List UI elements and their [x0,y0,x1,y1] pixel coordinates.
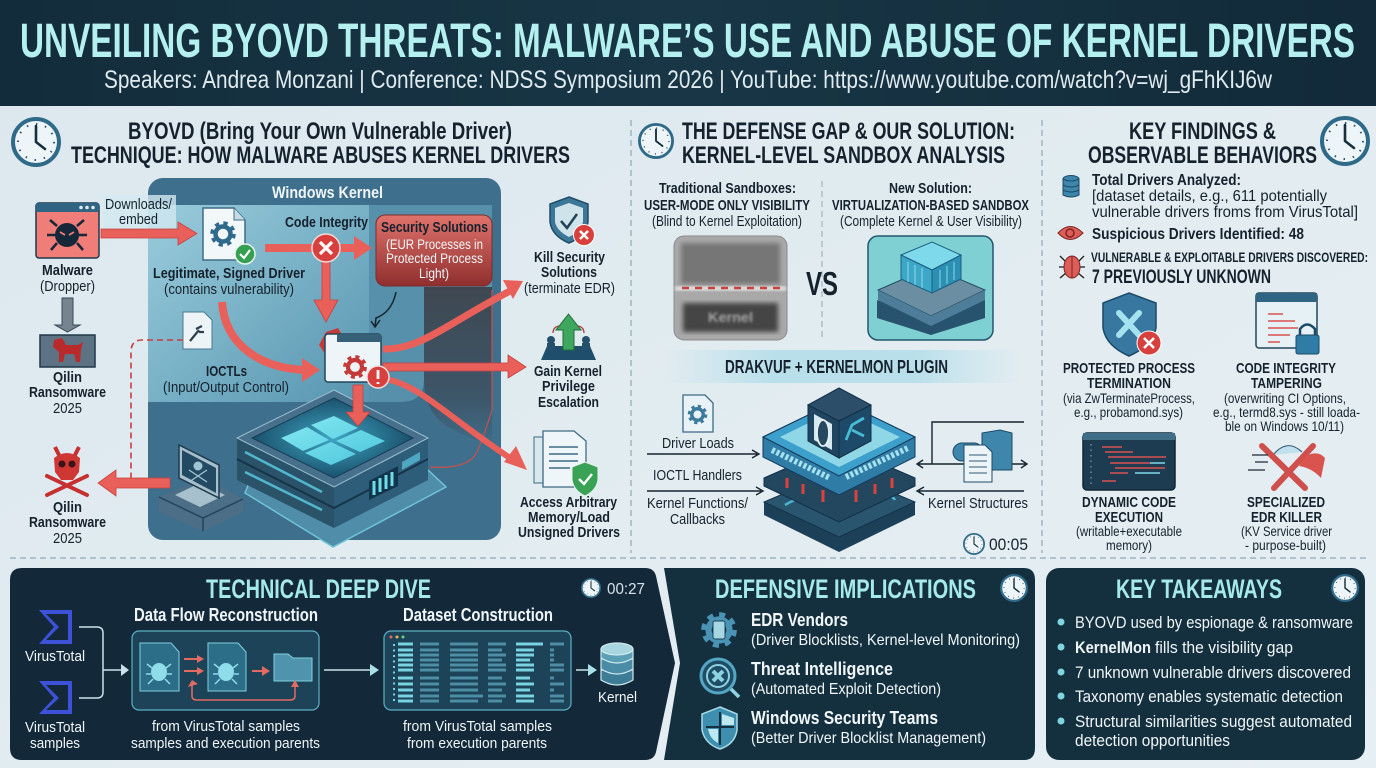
list: takeaways: Structural similarities suggest automated [1075,712,1352,731]
label: VirusTotal samples: VirusTotal [25,719,85,736]
text: dynamic code execution: memory) [1106,537,1152,553]
heading: key takeaways: KEY TAKEAWAYS [1116,574,1282,604]
banner: DRAKVUF KernelMon plugin [665,350,1020,383]
label: gain kernel privilege [534,363,602,411]
icon: bug [1059,256,1085,278]
text: suspicious drivers: Suspicious Drivers Identified: 48 [1092,226,1304,243]
label: gain kernel privilege: Escalation [538,394,599,411]
text: specialized EDR killer: EDR KILLER [1251,509,1322,526]
panel: key takeaways [1046,568,1365,760]
illustration: kernel server [237,390,446,547]
heading: dataset construction: Dataset Construction [403,605,553,625]
text: protected process termination [1063,360,1195,420]
text: traditional sandboxes: (Blind to Kernel Exploitation) [652,213,802,230]
label: kernel functions [647,495,749,528]
label: signed driver: (contains vulnerability) [164,281,294,298]
callout: downloads embed: Downloads/ [105,196,173,213]
text: Windows security teams: (Better Driver Blocklist Management) [751,730,986,747]
diagram: data flow [132,631,319,710]
callout: downloads embed: embed [119,211,158,228]
text: protected process termination: TERMINATION [1087,375,1171,392]
label: Qilin ransomware top: 2025 [53,400,82,417]
icon: dynamic code window [1083,433,1175,490]
text: traditional sandboxes: USER-MODE ONLY VISIBILITY [644,197,810,214]
text: code integrity tampering [1213,360,1360,434]
list: takeaways: KernelMon [1075,638,1151,657]
text: dynamic code execution: DYNAMIC CODE [1082,494,1176,511]
panel: technical deep dive [10,568,675,760]
list: takeaways [1058,613,1353,750]
text: dataset caption: from VirusTotal samples [403,718,552,735]
icon: kernel database [601,643,633,685]
label: kernel: Kernel [598,689,637,706]
icon: compromised process window [319,328,389,388]
label: Qilin ransomware bottom: Qilin [53,499,82,516]
list: takeaways: fills the visibility gap [1155,638,1293,657]
text: specialized EDR killer: SPECIALIZED [1247,494,1325,511]
icon: clock [1332,575,1358,601]
arrow: IOCTL handlers [647,487,763,495]
icon: signed driver document [203,208,255,264]
icon: crossed EDR killer [1248,446,1325,488]
icon: documents with shield [534,431,598,496]
text: code integrity tampering: ble on Windows 10/11) [1225,418,1344,434]
label: kill security solutions [524,249,615,297]
icon: IOCTL document [183,312,212,349]
panel: key findings [1058,118,1368,553]
label: signed driver [153,265,305,298]
panel: BYOVD technique [13,118,620,547]
text: data flow caption: from VirusTotal samples [152,718,300,735]
panel: defensive implications [664,568,1035,760]
text: total drivers: Total Drivers Analyzed: [1092,172,1241,189]
label: arbitrary memory [518,494,620,541]
text: Windows security teams: Windows Security Teams [751,708,938,728]
icon: database [1063,176,1079,197]
arrow: malware to driver [101,222,197,245]
label: code integrity: Code Integrity [285,214,369,231]
header banner [0,0,1376,106]
text: EDR vendors [751,610,1020,649]
arrow: driver loads [647,450,759,458]
icon: ransomware skull [47,447,87,495]
icon: Qilin lion [40,335,95,367]
text: data flow caption: samples and execution parents [131,735,320,752]
arrow: security solutions to exploit [371,292,396,327]
label: IOCTLs [163,363,289,396]
text: dynamic code execution [1076,494,1182,553]
panel: Windows Kernel [148,178,501,540]
text: specialized EDR killer [1241,494,1332,553]
label: Qilin ransomware top [29,369,106,417]
text: vulnerable drivers [1091,249,1368,288]
diagram: kernel structures connectors [917,422,1027,495]
text: threat intelligence: Threat Intelligence [751,659,893,679]
label: kernel structures: Kernel Structures [928,495,1028,512]
label: arbitrary memory: Memory/Load [528,509,610,526]
callout: security solutions: (EUR Processes in [386,236,483,252]
label: Qilin ransomware top: Ransomware [29,384,106,401]
label: Windows Kernel: Windows Kernel [272,183,383,202]
text: EDR vendors: (Driver Blocklists, Kernel-level Monitoring) [751,632,1020,649]
text: new solution [832,180,1029,230]
text: vulnerable drivers: 7 PREVIOUSLY UNKNOWN [1092,267,1271,288]
callout: security solutions: Light) [419,265,449,281]
text: traditional sandboxes [644,180,810,230]
icon: threat search [701,659,739,697]
label: malware dropper: (Dropper) [40,278,95,295]
label: arbitrary memory: Unsigned Drivers [518,524,620,541]
label: kill security solutions: Kill Security [534,249,606,266]
arrow: data flow to dataset [324,664,379,676]
label: signed driver: Legitimate, Signed Driver [153,265,305,282]
timer: 00:05: 00:05 [989,535,1028,554]
icon: windows shield [702,707,737,749]
label: arbitrary memory: Access Arbitrary [520,494,618,511]
label: Qilin ransomware bottom: 2025 [53,530,82,547]
icon: code window lock [1256,293,1319,354]
label: malware dropper: Malware [42,262,93,279]
arrow: exploit to kernel core [346,385,370,426]
text: new solution: New Solution: [889,180,972,197]
label: Qilin ransomware bottom [29,499,106,547]
icon: eye [1058,226,1083,240]
illustration: KernelMon stack [763,388,915,552]
text: total drivers: [dataset details, e.g., 611 potentially [1092,188,1327,205]
label: gain kernel privilege: Gain Kernel [534,363,602,380]
text: protected process termination: e.g., probamond.sys) [1074,404,1183,420]
illustration: blurred traditional sandbox [674,236,787,340]
text: code integrity tampering: CODE INTEGRITY [1236,360,1336,377]
text: dynamic code execution: EXECUTION [1095,509,1163,526]
text: dataset caption [403,718,552,752]
arrow: to privilege escalation [383,355,526,378]
heading: data flow reconstruction: Data Flow Reconstruction [134,605,318,625]
heading: defense gap: KERNEL-LEVEL SANDBOX ANALYSIS [682,142,1005,169]
banner: DRAKVUF KernelMon plugin: DRAKVUF + KERNELMON PLUGIN [725,357,948,377]
arrow: to kill security [383,280,523,349]
icon: clock [639,124,673,158]
text: protected process termination: (via ZwTerminateProcess, [1063,390,1195,406]
label: gain kernel privilege: Privilege [542,378,595,395]
text: total drivers: vulnerable drivers froms from VirusTotal] [1092,204,1358,221]
icon: VirusTotal sigma top [39,610,72,644]
illustration: blurred traditional sandbox: Kernel [708,309,753,325]
arrow: computer to ransomware skull [98,470,170,496]
diagram: dataset table [384,631,571,710]
icon: EDR gear [704,615,734,645]
heading: key findings [1088,118,1317,169]
timer: 00:05 [964,534,1028,554]
text: new solution: (Complete Kernel & User Visibility) [840,213,1022,230]
callout: security solutions: Protected Process [386,250,483,266]
heading: key findings: KEY FINDINGS & [1129,118,1276,145]
text: EDR vendors: EDR Vendors [751,610,848,630]
callout: security solutions [376,215,492,286]
label: VirusTotal samples [25,719,85,752]
heading: BYOVD technique [71,118,570,169]
label: kill security solutions: Solutions [541,264,597,281]
arrow: dashed IOCTL path [131,340,183,478]
label: driver loads: Driver Loads [662,435,734,452]
text: data flow caption [131,718,320,752]
heading: BYOVD technique: TECHNIQUE: HOW MALWARE ABUSES KERNEL DRIVERS [71,142,570,169]
heading: defense gap [682,118,1015,169]
label: VirusTotal: VirusTotal [25,648,85,665]
label: IOCTLs: (Input/Output Control) [163,379,289,396]
label: IOCTL handlers: IOCTL Handlers [653,467,742,484]
icon: clock [13,119,59,165]
text: specialized EDR killer: - purpose-built) [1245,537,1326,553]
heading: defensive implications: DEFENSIVE IMPLICATIONS [715,574,976,604]
icon: clock [1001,575,1027,601]
icon: protected process shield [1103,293,1161,356]
callout: downloads embed [103,195,176,232]
list: takeaways: detection opportunities [1075,731,1230,750]
list: takeaways: Taxonomy enables systematic detection [1075,687,1343,706]
text: new solution: VIRTUALIZATION-BASED SANDBOX [832,197,1029,214]
label: kernel functions: Callbacks [670,511,725,528]
illustration: virtualization sandbox [868,236,993,340]
text: traditional sandboxes: Traditional Sandboxes: [659,180,796,197]
label: malware dropper [40,262,95,295]
timer: 00:27: 00:27 [607,581,645,598]
icon: VirusTotal sigma bottom [39,681,72,714]
text: code integrity tampering: TAMPERING [1251,375,1322,392]
label: VirusTotal samples: samples [30,735,80,752]
text: protected process termination: PROTECTED PROCESS [1063,360,1195,377]
icon: driver file [683,395,713,432]
arrow: to arbitrary memory [385,379,527,470]
text: threat intelligence [751,659,941,698]
text: dataset caption: from execution parents [407,735,547,752]
icon: malware window [36,203,99,258]
label: IOCTLs: IOCTLs [206,363,247,380]
heading: technical deep dive: TECHNICAL DEEP DIVE [206,574,431,604]
label: Qilin ransomware bottom: Ransomware [29,514,106,531]
timer: 00:27 [582,579,645,598]
arrow: driver to exploit [222,302,320,382]
heading: BYOVD technique: BYOVD (Bring Your Own Vulnerable Driver) [128,118,512,145]
callout: security solutions: Security Solutions [381,219,488,236]
text: dynamic code execution: (writable+executable [1076,523,1182,539]
text: Windows security teams [751,708,986,747]
arrow: dataset to kernel [576,664,597,676]
icon: clock [1322,118,1368,164]
list: takeaways: 7 unknown vulnerable drivers discovered [1075,663,1351,682]
arrow: dropper to Qilin [55,298,80,332]
arrow: VirusTotal merge [79,627,129,698]
panel: defense gap and solution [639,118,1029,554]
label: kernel functions: Kernel Functions/ [647,495,749,512]
text: specialized EDR killer: (KV Service driver [1241,523,1332,539]
label: Qilin ransomware top: Qilin [53,369,82,386]
icon: privilege escalation [541,314,596,360]
text: threat intelligence: (Automated Exploit Detection) [751,681,941,698]
text: code integrity tampering: (overwriting CI Options, [1224,390,1346,406]
icon: infected computer [159,445,243,531]
heading: defense gap: THE DEFENSE GAP & OUR SOLUTION: [682,118,1015,145]
icon: shield kill [550,197,594,246]
arrow: blocked at code integrity [265,234,372,322]
label: kill security solutions: (terminate EDR) [524,280,615,297]
text: total drivers [1092,172,1358,221]
label: versus: VS [806,265,838,302]
